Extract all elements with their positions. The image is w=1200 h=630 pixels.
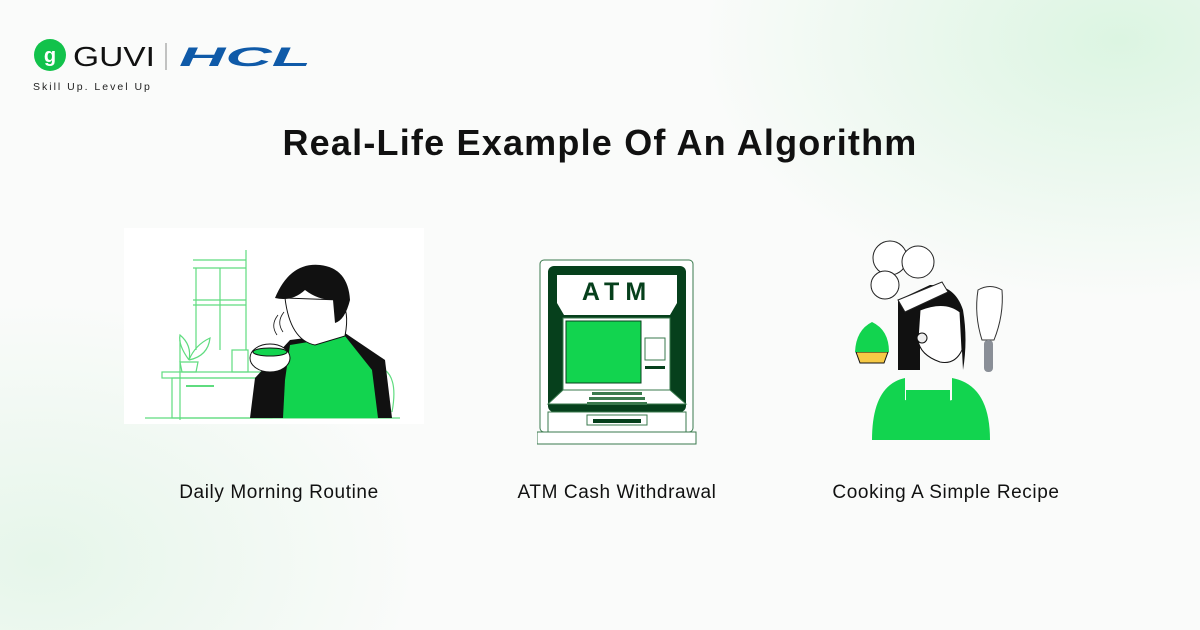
illustration: ATM: ATM [582,278,652,306]
caption: ATM: ATM Cash Withdrawal [518,482,716,503]
illustration: ATM [537,260,696,444]
title: Real-Life Example Of An Algorithm [282,122,918,163]
caption: morning: Daily Morning Routine [179,482,379,503]
icon: guvi circle [34,39,66,71]
person [250,333,392,418]
icon: guvi circle: g [44,45,56,67]
tagline: Skill Up. Level Up [33,81,152,93]
brand: GUVI: GUVI [73,41,155,72]
illustration: morning routine [124,250,400,424]
brand: HCL: HCL [179,42,311,72]
illustration: chef [855,240,1003,440]
logo [33,39,311,93]
caption: recipe: Cooking A Simple Recipe [832,482,1060,503]
